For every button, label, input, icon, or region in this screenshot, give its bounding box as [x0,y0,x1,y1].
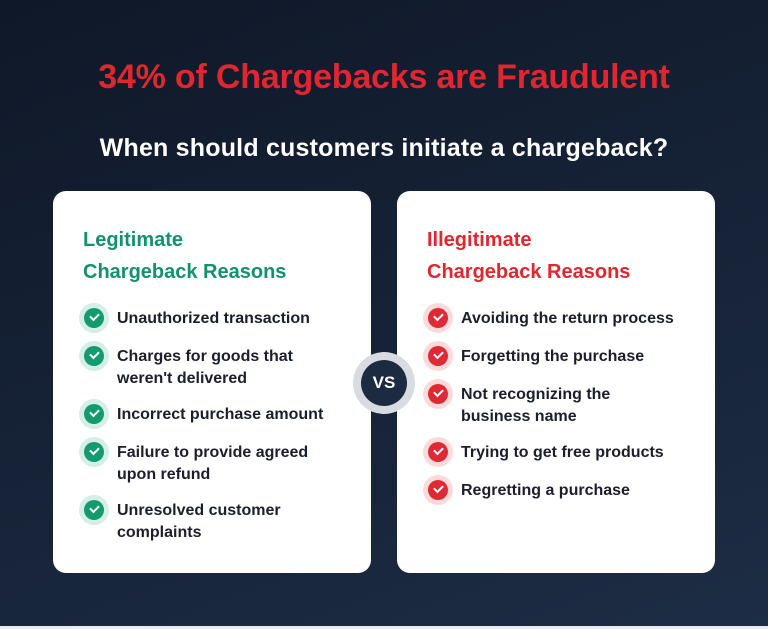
title: 34% of Chargebacks are Fraudulent [98,58,670,96]
panel: legitimate [53,191,371,573]
item 3: business name [461,408,577,425]
item 1 [423,303,674,333]
item 2: Charges for goods that [117,348,293,365]
item 5: complaints [117,524,201,541]
item 4: upon refund [117,466,210,483]
item 3 [423,379,610,425]
heading: illegitimate: Chargeback Reasons [427,261,630,283]
subtitle: When should customers initiate a chargeback? [100,134,668,162]
item 5 [79,495,281,541]
item 4 [423,437,664,467]
item 5: Unresolved customer [117,502,281,519]
heading: illegitimate: Illegitimate [427,229,531,251]
item 1 [79,303,310,333]
item 5 [423,475,630,505]
item 4: Trying to get free products [461,444,664,461]
item 5: Regretting a purchase [461,482,630,499]
item 2 [423,341,644,371]
item 3: Incorrect purchase amount [117,406,323,423]
heading: legitimate [83,229,286,283]
item 2: Forgetting the purchase [461,348,644,365]
panel: illegitimate [397,191,715,573]
item 3: Not recognizing the [461,386,610,403]
heading: legitimate: Chargeback Reasons [83,261,286,283]
heading: legitimate: Legitimate [83,229,183,251]
item 4 [79,437,308,483]
item 4: Failure to provide agreed [117,444,308,461]
item 2 [79,341,293,387]
item 1: Unauthorized transaction [117,310,310,327]
item 3 [79,399,324,429]
vs badge: VS [373,373,395,392]
item 2: weren't delivered [117,370,247,387]
item 1: Avoiding the return process [461,310,674,327]
heading: illegitimate [427,229,630,283]
vs badge [353,352,415,414]
